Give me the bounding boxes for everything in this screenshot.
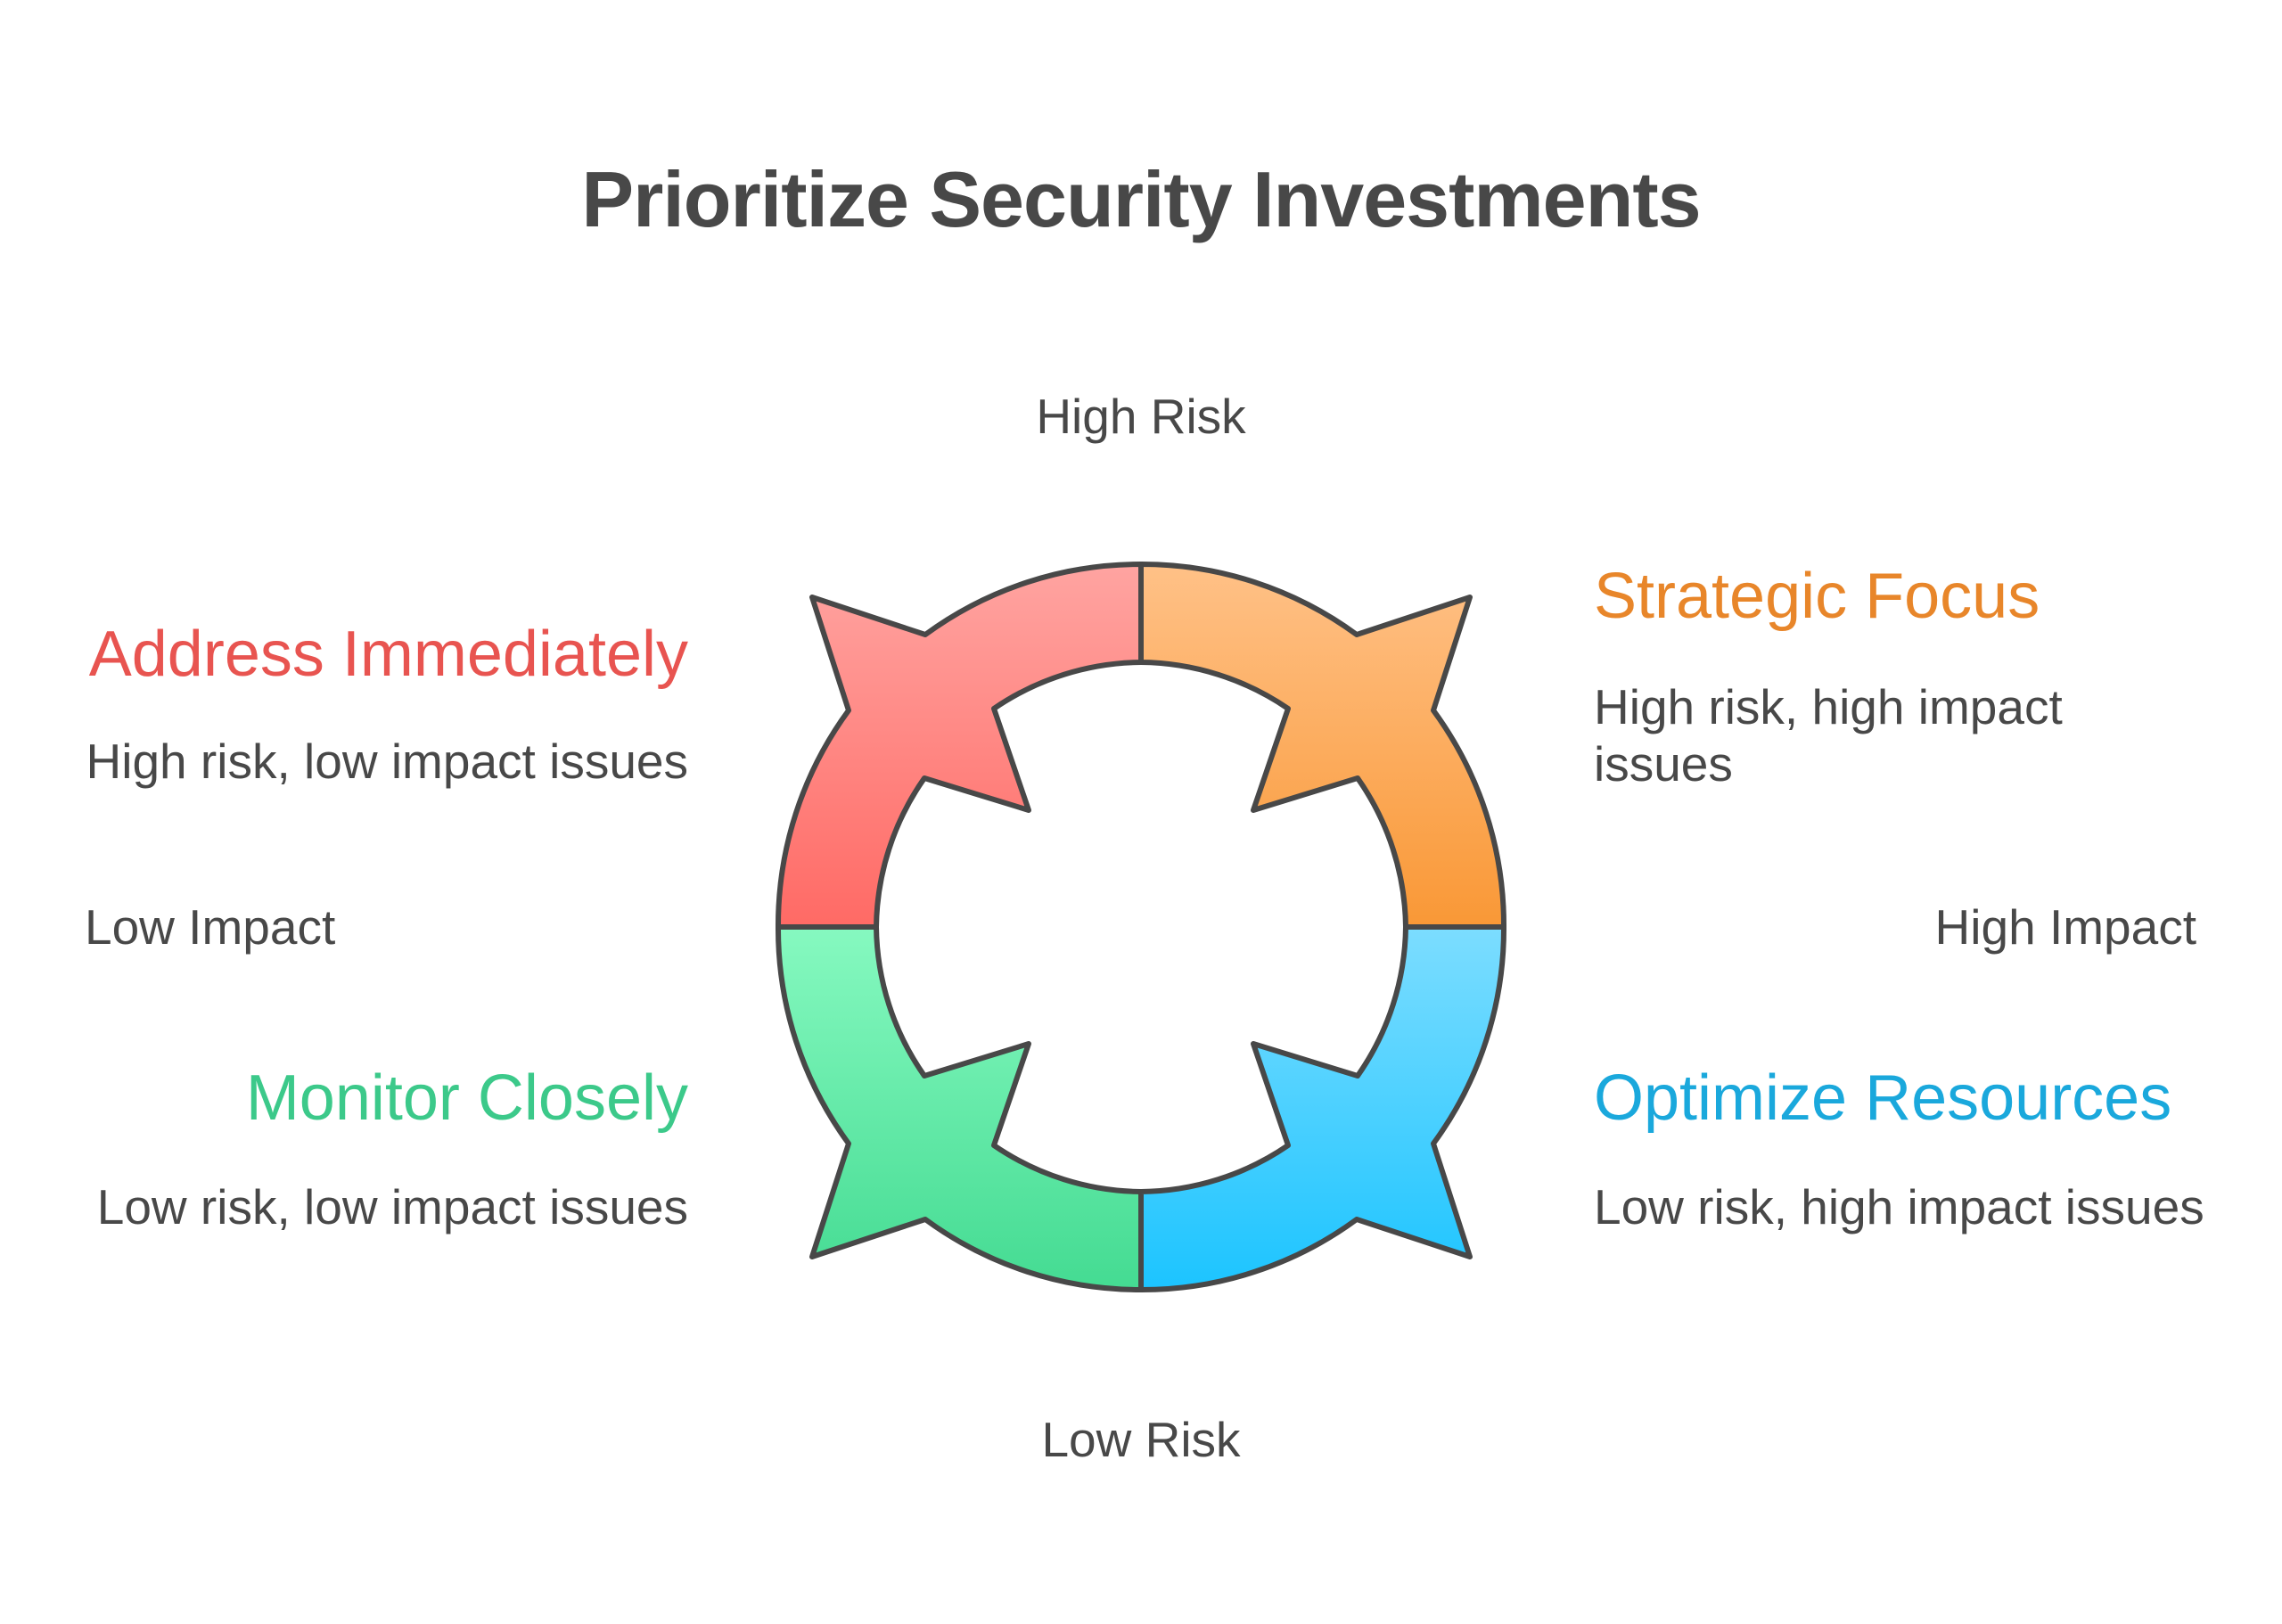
description: issues [1594, 736, 1733, 791]
heading: strategic focus: Strategic Focus [1594, 561, 2040, 632]
description: High risk, high impact [1594, 679, 2063, 734]
text block: monitor closely [97, 1062, 688, 1234]
axis label: low risk: Low Risk [1041, 1412, 1241, 1467]
quadrant: address immediately (red) [778, 564, 1141, 927]
axis label: low impact: Low Impact [85, 899, 335, 955]
description: Low risk, low impact issues [97, 1179, 688, 1234]
quadrant: monitor closely (green) [778, 927, 1141, 1290]
text block: address immediately [86, 619, 688, 789]
description [1594, 679, 2063, 791]
text block: strategic focus [1594, 561, 2063, 791]
description: Low risk, high impact issues [1594, 1179, 2204, 1234]
heading: address immediately: Address Immediately [89, 619, 688, 690]
quadrant: optimize resources (blue) [1141, 927, 1504, 1290]
text block: optimize resources [1594, 1062, 2204, 1234]
title: Prioritize Security Investments [581, 155, 1701, 243]
axis label: high impact: High Impact [1935, 899, 2196, 955]
heading: monitor closely: Monitor Closely [246, 1062, 688, 1134]
heading: optimize resources: Optimize Resources [1594, 1062, 2171, 1134]
axis label: high risk: High Risk [1036, 389, 1246, 444]
description: High risk, low impact issues [86, 734, 688, 789]
quadrant: strategic focus (orange) [1141, 564, 1504, 927]
